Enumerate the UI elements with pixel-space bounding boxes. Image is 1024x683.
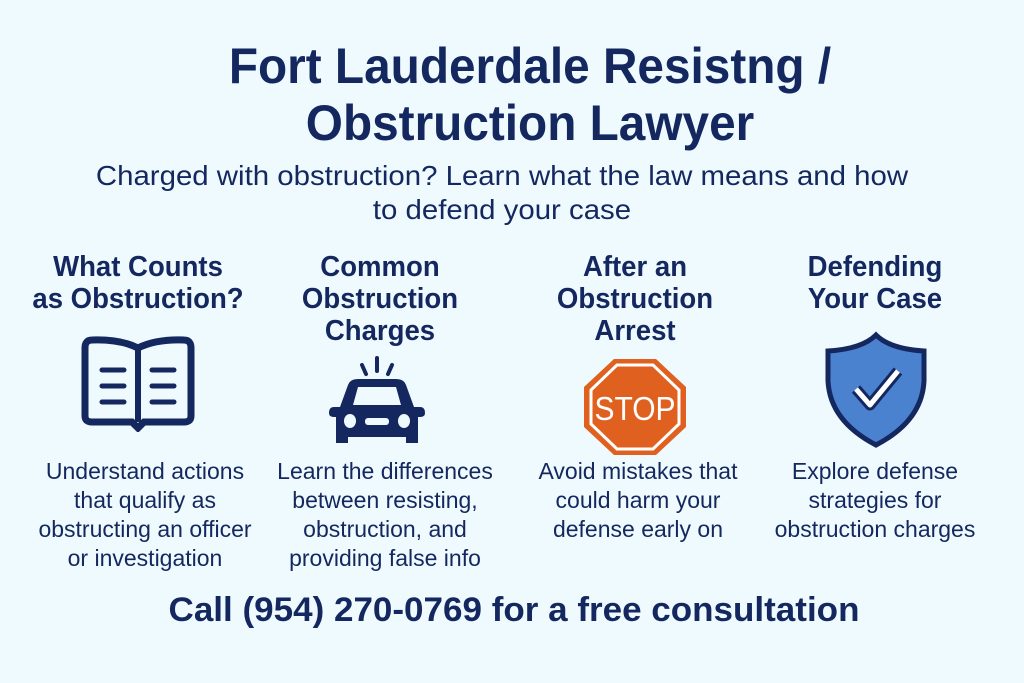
desc: col2: providing false info [289, 545, 481, 571]
desc: col1: Understand actions [46, 458, 244, 484]
heading: defending [808, 251, 942, 315]
icon: car [329, 356, 425, 443]
desc: col3: defense early on [553, 516, 723, 542]
heading: after arrest [557, 251, 713, 347]
desc: col2: obstruction, and [303, 516, 467, 542]
desc: col1: obstructing an officer [38, 516, 252, 542]
heading: after arrest: After an [583, 251, 687, 283]
desc: col1 [38, 458, 252, 571]
desc: col4 [775, 458, 975, 542]
subtitle: to defend your case [373, 194, 631, 225]
heading: common charges: Charges [325, 315, 435, 347]
heading: defending: Defending [808, 251, 942, 283]
heading: common charges: Obstruction [302, 283, 458, 315]
heading: defending: Your Case [808, 283, 942, 315]
desc: col1: or investigation [68, 545, 222, 571]
heading: after arrest: Obstruction [557, 283, 713, 315]
desc: col3: Avoid mistakes that [538, 458, 738, 484]
heading: after arrest: Arrest [594, 315, 676, 347]
desc: col4: Explore defense [792, 458, 958, 484]
subtitle [96, 160, 908, 225]
heading: what counts [32, 251, 244, 315]
heading: common charges [302, 251, 458, 347]
desc: col4: obstruction charges [775, 516, 975, 542]
icon: stop sign: STOP [594, 390, 676, 428]
icon: shield [826, 332, 926, 448]
desc: col2: between resisting, [292, 487, 478, 513]
heading: common charges: Common [320, 251, 440, 283]
desc: col4: strategies for [809, 487, 941, 513]
desc: col2: Learn the differences [277, 458, 493, 484]
call to action: Call (954) 270-0769 for a free consultation [169, 591, 859, 629]
title: Fort Lauderdale Resistng / [229, 38, 831, 94]
desc: col3: could harm your [556, 487, 720, 513]
desc: col2 [277, 458, 493, 571]
heading: what counts: as Obstruction? [32, 283, 244, 315]
icon: book [82, 336, 194, 432]
subtitle: Charged with obstruction? Learn what the law means and how [96, 160, 908, 191]
title [229, 38, 831, 151]
icon: stop sign [584, 359, 686, 455]
desc: col3 [538, 458, 738, 542]
title: Obstruction Lawyer [306, 95, 754, 151]
heading: what counts: What Counts [53, 251, 223, 283]
desc: col1: that qualify as [74, 487, 216, 513]
